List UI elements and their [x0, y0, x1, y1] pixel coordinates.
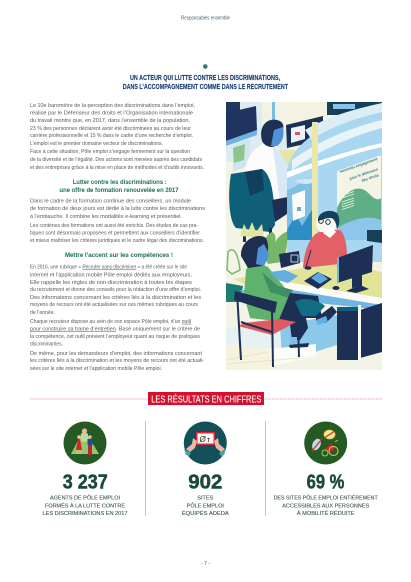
- icon: accessibility: [304, 422, 347, 464]
- label: agents: AGENTS DE PÔLE EMPLOI: [50, 495, 120, 502]
- icon: tablet held in hands: [184, 422, 227, 464]
- number: 902: 902: [188, 471, 222, 493]
- page number: - 7 -: [201, 561, 210, 567]
- paragraph: recruteur: [30, 319, 200, 348]
- paragraph: rubrique: En 2016, une rubrique « Recruter sans discriminer » a été créée sur le site: [30, 264, 187, 270]
- intro paragraph: [30, 103, 195, 147]
- label: agents: FORMÉS À LA LUTTE CONTRE: [45, 502, 125, 509]
- paragraph: rubrique: Des informations concernant les critères liés à la discrimination et les: [30, 295, 201, 301]
- label: agents: [42, 495, 128, 517]
- paragraph: demandeurs: De même, pour les demandeurs d’emploi, des informations concernant: [30, 351, 203, 357]
- seated visitor and chair: [234, 236, 337, 367]
- poster: [337, 155, 381, 208]
- heading: formation: [60, 179, 179, 194]
- label: sites: SITES: [197, 496, 213, 502]
- paragraph: formation: de formation de deux jours est dédié à la lutte contre les discriminations: [30, 206, 205, 212]
- heading: formation: une offre de formation renouvelée en 2017: [60, 187, 179, 194]
- icon: three agents: [64, 422, 106, 464]
- desk items: monitor, tablet, mic: [304, 245, 373, 293]
- glass partition: des droits: [361, 172, 380, 183]
- glass partition: nouveau engagement: [339, 156, 379, 174]
- paragraph: rubrique: [30, 264, 201, 316]
- paragraph: rubrique: de l’année.: [30, 310, 55, 316]
- illustration: agency reception desk: [226, 102, 382, 370]
- heading: compétences: Mettre l’accent sur les compétences !: [65, 252, 173, 259]
- label: sites: [182, 496, 229, 517]
- cream post: [312, 122, 318, 240]
- label: agents: LES DISCRIMINATIONS EN 2017: [42, 511, 128, 517]
- paragraph: formation: Dans le cadre de la formation continue des conseillers, un module: [30, 198, 191, 204]
- second paragraph: de la diversité et de l’égalité. Des actions sont menées auprès des candidats: [30, 157, 202, 163]
- paragraph: rubrique: moyens de recours ont été actualisées sur ces mêmes rubriques au cours: [30, 302, 198, 308]
- paragraph: rubrique: Elle rappelle les règles de non-discrimination à toutes les étapes: [30, 280, 192, 286]
- tablet held up: [279, 251, 300, 268]
- paragraph: demandeurs: sées sur le site internet et l’application mobile Pôle emploi.: [30, 366, 162, 372]
- paragraph: demandeurs: les critères liés à la discrimination et les moyens de recours ont été actuali-: [30, 358, 204, 364]
- paragraph: formation: à l’embauche. Il combine les modalités e-learning et présentiel.: [30, 214, 182, 220]
- intro paragraph: réalisé par le Défenseur des droits et l’Organisation internationale: [30, 110, 193, 116]
- label: accessibility: [274, 495, 378, 517]
- paragraph: recruteur: discriminantes.: [30, 342, 63, 348]
- column dividers: [146, 421, 266, 516]
- label: accessibility: ACCESSIBLES AUX PERSONNES: [282, 503, 369, 509]
- paragraph: contenus: et mieux maîtriser les critères juridiques et le cadre légal des discriminations.: [30, 238, 204, 244]
- running header: Responsables ensemble: [181, 16, 230, 22]
- intro paragraph: du travail montre que, en 2017, dans l’ensemble de la population,: [30, 118, 190, 124]
- label: sites: ÉQUIPÉS ADEDA: [182, 510, 229, 517]
- paragraph: rubrique: du recrutement et donne des conseils pour la rédaction d’une offre d’emploi.: [30, 287, 201, 293]
- paragraph: rubrique: internet et l’application mobile Pôle emploi dédiés aux employeurs.: [30, 272, 192, 278]
- paragraph: formation: [30, 198, 205, 220]
- green bullet dot: [203, 64, 208, 69]
- leaflet on partition: [292, 190, 305, 221]
- desk: [233, 264, 382, 298]
- intro paragraph: L’emploi est le premier domaine vecteur de discriminations.: [30, 141, 163, 147]
- paragraph: contenus: Les contenus des formations ont aussi été enrichis. Des études de cas pra-: [30, 223, 198, 229]
- plants: [226, 222, 287, 302]
- floor: [226, 315, 337, 370]
- number: 3 237: 3 237: [63, 471, 108, 493]
- monitor behind glass: [286, 116, 323, 148]
- icon: tablet held in hands: T: [207, 438, 210, 444]
- advisor seen from the back: [229, 120, 290, 242]
- paragraph: demandeurs: [30, 351, 204, 372]
- paragraph: recruteur: Chaque recruteur dispose au sein de son espace Pôle emploi, d’un outil: [30, 319, 191, 325]
- title: UN ACTEUR QUI LUTTE CONTRE LES DISCRIMINATIONS,: [130, 73, 280, 82]
- title: DANS L’ACCOMPAGNEMENT COMME DANS LE RECRUTEMENT: [123, 82, 288, 91]
- intro paragraph: Le 10e baromètre de la perception des discriminations dans l’emploi,: [30, 103, 195, 109]
- label: sites: PÔLE EMPLOI: [187, 502, 224, 509]
- title: [123, 73, 288, 91]
- second paragraph: Face à cette situation, Pôle emploi s’engage fermement sur la question: [30, 149, 190, 155]
- results divider dotted lines: [30, 398, 382, 400]
- desk legs: [337, 307, 358, 360]
- banner: results: LES RÉSULTATS EN CHIFFRES: [151, 393, 261, 406]
- paragraph: contenus: tiques sont désormais proposées et permettent aux conseillers d’identifier: [30, 230, 200, 236]
- advisor woman: [303, 211, 347, 272]
- paragraph: recruteur: pour construire sa trame d’entretien . Basé uniquement sur le critère de: [30, 326, 200, 332]
- heading: formation: Lutter contre les discriminations :: [73, 179, 167, 186]
- intro paragraph: carrière professionnelle et 15 % dans le cadre d’une recherche d’emploi.: [30, 133, 193, 139]
- second paragraph: [30, 149, 204, 171]
- number: 69 %: 69 %: [307, 471, 345, 493]
- banner: results: [148, 392, 264, 406]
- label: accessibility: À MOBILITÉ RÉDUITE: [297, 510, 355, 517]
- intro paragraph: 23 % des personnes déclarent avoir été discriminées au cours de leur: [30, 126, 191, 132]
- icon: tablet held in hands: Ø: [198, 435, 206, 444]
- jacket on chair: [229, 169, 275, 232]
- paragraph: recruteur: la compétence, cet outil prévient l’employeur quant au risque de pratiques: [30, 334, 200, 340]
- label: accessibility: DES SITES PÔLE EMPLOI ENTIÈREMENT: [274, 495, 378, 502]
- second paragraph: et des entreprises grâce à la mise en place de méthodes et d’outils innovants.: [30, 165, 204, 171]
- glass partition: pour le défenseur: [349, 166, 379, 181]
- chair: [234, 291, 277, 313]
- paragraph: contenus: [30, 223, 204, 244]
- glass partition: [287, 103, 382, 262]
